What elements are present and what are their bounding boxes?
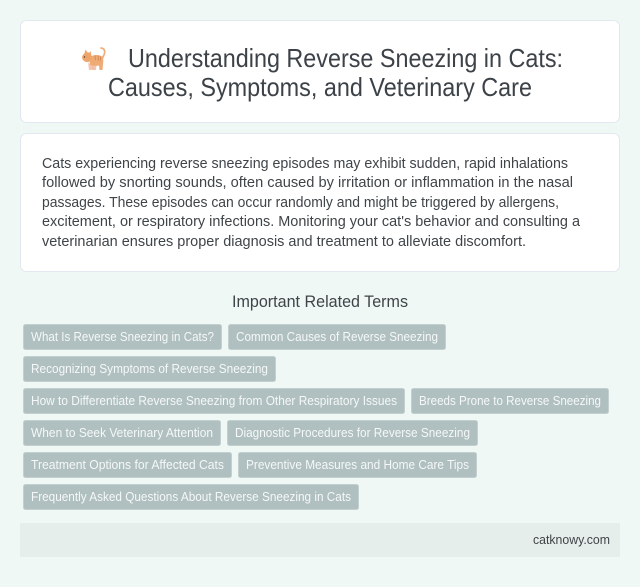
- tag: How to Differentiate Reverse Sneezing from Other Respiratory Issues: [31, 393, 397, 408]
- tag: [24, 452, 232, 478]
- text block: description: followed by snorting sounds, often caused by irritation or inflammation in the nasal: [42, 174, 573, 191]
- tag: Preventive Measures and Home Care Tips: [246, 457, 469, 472]
- panel: title card: [20, 20, 620, 122]
- footer: catknowy.com: [533, 532, 610, 547]
- icon: cat: [82, 47, 106, 70]
- tag: Treatment Options for Affected Cats: [31, 457, 224, 472]
- tag: What Is Reverse Sneezing in Cats?: [31, 329, 214, 344]
- tag: [24, 356, 276, 382]
- text block: description: veterinarian ensures proper diagnosis and treatment to alleviate discomfort.: [42, 233, 526, 250]
- tag: Recognizing Symptoms of Reverse Sneezing: [31, 361, 268, 376]
- tag list: [24, 324, 608, 510]
- tag: [228, 324, 446, 350]
- tag: [24, 420, 220, 446]
- tag: When to Seek Veterinary Attention: [31, 425, 213, 440]
- title: Understanding Reverse Sneezing in Cats:: [128, 45, 563, 73]
- title: Causes, Symptoms, and Veterinary Care: [108, 74, 532, 102]
- tag: [24, 484, 358, 510]
- tag: [228, 420, 478, 446]
- tag: Frequently Asked Questions About Reverse Sneezing in Cats: [31, 489, 351, 504]
- tag: Diagnostic Procedures for Reverse Sneezing: [235, 425, 470, 440]
- tag: [24, 388, 404, 414]
- heading: related terms: Important Related Terms: [232, 293, 408, 311]
- footer: [20, 523, 620, 557]
- text block: description: [42, 155, 581, 250]
- panel: description: [20, 134, 620, 272]
- text block: description: Cats experiencing reverse sneezing episodes may exhibit sudden, rapid inhalations: [42, 155, 568, 172]
- tag: [24, 324, 222, 350]
- tag: Breeds Prone to Reverse Sneezing: [419, 393, 601, 408]
- text block: description: excitement, or respiratory infections. Monitoring your cat's behavior and consulting a: [42, 213, 581, 230]
- tag: Common Causes of Reverse Sneezing: [236, 329, 438, 344]
- tag: [412, 388, 608, 414]
- text block: description: passages. These episodes can occur randomly and might be triggered by allergens,: [42, 194, 559, 211]
- tag: [238, 452, 476, 478]
- title: [108, 45, 563, 102]
